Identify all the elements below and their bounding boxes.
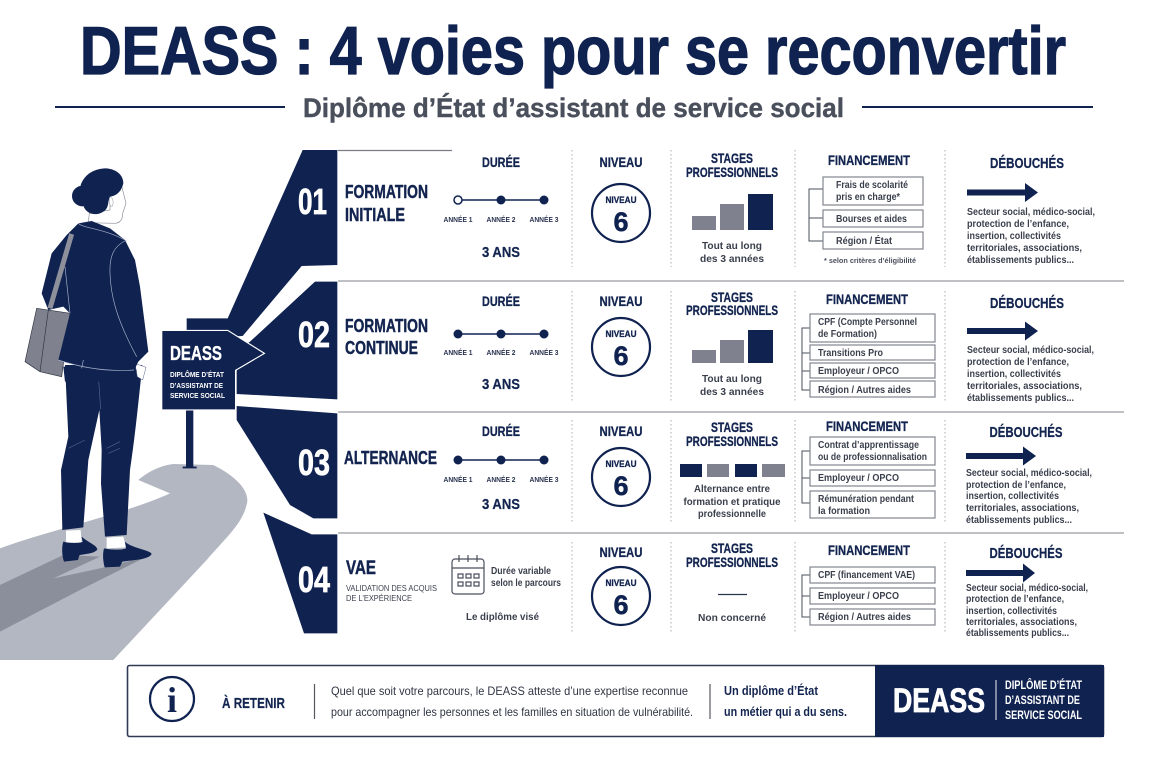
- row 03 funding: FINANCEMENT: [826, 419, 909, 434]
- row 03 careers: territoriales, associations,: [966, 503, 1079, 514]
- row 02 internships: PROFESSIONNELS: [686, 303, 778, 318]
- callout: à retenir: [128, 665, 1104, 737]
- row 02 careers: [967, 295, 1094, 404]
- row 03 careers: DÉBOUCHÉS: [990, 424, 1062, 441]
- row 04 name: DE L’EXPÉRIENCE: [346, 594, 412, 603]
- row 02 funding: Transitions Pro: [818, 348, 883, 359]
- row 03 level: [592, 424, 650, 506]
- route shape 04: [263, 513, 337, 633]
- row 01 level: NIVEAU: [600, 155, 642, 170]
- row 04 internships: Non concerné: [698, 612, 766, 624]
- route numbers: 02: [298, 314, 330, 355]
- callout heading: À RETENIR: [222, 695, 285, 712]
- row 04 name: [346, 558, 437, 603]
- row 04 careers: insertion, collectivités: [966, 606, 1057, 617]
- callout tagline: [724, 683, 847, 719]
- row 03 careers: insertion, collectivités: [966, 491, 1059, 502]
- row 02 duration: [444, 294, 559, 393]
- row 02 careers: insertion, collectivités: [967, 369, 1061, 380]
- row 04 careers: établissements publics...: [966, 628, 1069, 639]
- row 03 duration: DURÉE: [482, 424, 520, 439]
- woman: [25, 168, 152, 567]
- row 04 careers: protection de l’enfance,: [966, 594, 1064, 605]
- row 01 careers: protection de l’enfance,: [967, 219, 1069, 230]
- row 03 duration: ANNÉE 1: [444, 475, 473, 484]
- row 01 careers: territoriales, associations,: [967, 243, 1082, 254]
- row 02 careers: Secteur social, médico-social,: [967, 345, 1094, 356]
- row 03 funding: ou de professionnalisation: [818, 452, 927, 463]
- row 01 careers: [967, 155, 1095, 266]
- route numbers: 04: [298, 559, 330, 600]
- row 02 duration: DURÉE: [482, 294, 520, 309]
- row 01 duration: ANNÉE 3: [530, 215, 559, 224]
- row 01 duration: ANNÉE 2: [486, 215, 516, 224]
- sign board: [162, 331, 263, 409]
- row 02 funding: de Formation): [818, 329, 877, 340]
- row 02 funding: FINANCEMENT: [826, 292, 909, 307]
- route numbers: 01: [298, 181, 327, 222]
- row 01 funding: Bourses et aides: [836, 214, 907, 225]
- row 04 duration: Durée variable: [491, 566, 551, 577]
- row 02 duration: ANNÉE 1: [444, 348, 473, 357]
- row 01 funding: [809, 153, 923, 265]
- row 02 level: [592, 294, 650, 376]
- row 04 level: [592, 545, 650, 625]
- row 03 level: 6: [613, 471, 629, 501]
- row 03 duration: ANNÉE 2: [486, 475, 516, 484]
- row 03 careers: établissements publics...: [966, 515, 1072, 526]
- row 01 name: [345, 182, 428, 225]
- row 01 level: 6: [613, 207, 629, 237]
- row 01 internships: [686, 151, 778, 265]
- row 03 duration: ANNÉE 3: [530, 475, 559, 484]
- route numbers: [298, 181, 330, 600]
- path: [0, 464, 247, 660]
- route numbers: 03: [298, 442, 330, 483]
- row 02 internships: des 3 années: [700, 386, 764, 398]
- row 01 level: [592, 155, 650, 242]
- row 02 careers: DÉBOUCHÉS: [990, 295, 1064, 312]
- row 02 internships: [686, 290, 778, 398]
- route shape 01: [187, 150, 337, 337]
- route shape 03: [237, 406, 337, 518]
- row 01 careers: établissements publics...: [967, 255, 1074, 266]
- row 02 funding: Région / Autres aides: [818, 385, 911, 396]
- row 01: formation initiale: [345, 151, 1095, 266]
- row 04 level: 6: [613, 590, 629, 620]
- sign post: [183, 409, 197, 468]
- icon: information: i: [167, 680, 177, 720]
- row 03 funding: Rémunération pendant: [818, 494, 915, 505]
- sign text: DEASS: [170, 343, 222, 365]
- row 04 funding: CPF (financement VAE): [818, 570, 915, 581]
- row 02 duration: ANNÉE 2: [486, 348, 516, 357]
- row 03 funding: Employeur / OPCO: [818, 473, 899, 484]
- DEASS badge: [875, 665, 1104, 737]
- row 02 careers: territoriales, associations,: [967, 381, 1082, 392]
- row 01 name: INITIALE: [345, 205, 405, 225]
- row 04 careers: Secteur social, médico-social,: [966, 583, 1088, 594]
- row 04 internships: PROFESSIONNELS: [686, 555, 778, 570]
- callout body: pour accompagner les personnes et les familles en situation de vulnérabilité.: [331, 705, 693, 719]
- row 03 internships: formation et pratique: [684, 497, 781, 508]
- row 03 duration: [444, 424, 559, 513]
- row 01 level: NIVEAU: [606, 195, 637, 206]
- row 01 duration: ANNÉE 1: [444, 215, 473, 224]
- row 03 name: ALTERNANCE: [344, 448, 437, 468]
- row 03 careers: Secteur social, médico-social,: [966, 468, 1092, 479]
- row 01 duration: DURÉE: [482, 155, 520, 170]
- row 01 internships: STAGES: [711, 151, 753, 166]
- callout tagline: un métier qui a du sens.: [724, 705, 847, 719]
- row 02 careers: protection de l’enfance,: [967, 357, 1069, 368]
- row 01 name: FORMATION: [345, 182, 428, 202]
- row 02 name: FORMATION: [345, 316, 428, 336]
- sign text: DIPLÔME D’ÉTAT: [170, 370, 224, 379]
- row 01 duration: 3 ANS: [482, 244, 520, 261]
- row 02 level: NIVEAU: [606, 329, 637, 340]
- row 03 level: NIVEAU: [600, 424, 642, 439]
- row 04 duration: Le diplôme visé: [466, 611, 539, 623]
- row 04 careers: [966, 545, 1088, 639]
- row 03 internships: STAGES: [711, 420, 753, 435]
- row 03 duration: 3 ANS: [482, 496, 520, 513]
- row 03 internships: PROFESSIONNELS: [686, 434, 778, 449]
- row 01 funding: pris en charge*: [836, 192, 900, 203]
- row 02 level: NIVEAU: [600, 294, 642, 309]
- row 03 internships: Alternance entre: [694, 484, 770, 495]
- row 04 name: VALIDATION DES ACQUIS: [346, 584, 437, 593]
- row 04 internships: STAGES: [711, 541, 753, 556]
- icon: calendar: [452, 555, 484, 594]
- DEASS badge: DIPLÔME D’ÉTAT: [1005, 679, 1082, 692]
- row 04 duration: [466, 566, 561, 623]
- row 01 careers: DÉBOUCHÉS: [990, 155, 1064, 172]
- row 04 funding: [802, 543, 935, 625]
- row 02 internships: Tout au long: [702, 373, 762, 385]
- row 01 careers: Secteur social, médico-social,: [967, 207, 1095, 218]
- row 04 careers: DÉBOUCHÉS: [990, 545, 1062, 562]
- row 02 name: [345, 316, 428, 358]
- row 03 funding: Contrat d’apprentissage: [818, 440, 919, 451]
- row 01 funding: Région / État: [836, 234, 893, 247]
- sign text: SERVICE SOCIAL: [170, 391, 225, 400]
- row 01 duration: [444, 155, 559, 261]
- row 01 funding: * selon critères d’éligibilité: [824, 258, 916, 265]
- row 03 funding: [802, 419, 935, 518]
- sign text: D’ASSISTANT DE: [170, 381, 223, 390]
- route shape 02: [233, 282, 337, 399]
- subtitle: Diplôme d’État d’assistant de service social: [303, 92, 844, 123]
- row 02 duration: ANNÉE 3: [530, 348, 559, 357]
- row 04 duration: selon le parcours: [491, 578, 561, 589]
- row 03: alternance: [344, 419, 1092, 526]
- row dividers: [338, 150, 1124, 633]
- row 01 careers: insertion, collectivités: [967, 231, 1061, 242]
- row 02: formation continue: [345, 290, 1094, 404]
- row 01 internships: des 3 années: [700, 253, 764, 265]
- row 03 funding: la formation: [818, 506, 870, 517]
- row 02 internships: STAGES: [711, 290, 753, 305]
- row 04 funding: Employeur / OPCO: [818, 591, 899, 602]
- row 02 funding: CPF (Compte Personnel: [818, 317, 917, 328]
- callout body: [331, 684, 693, 719]
- illustration: woman on a path facing the sign: [0, 150, 337, 660]
- sign text: [170, 343, 225, 400]
- row 02 duration: 3 ANS: [482, 376, 520, 393]
- DEASS badge: SERVICE SOCIAL: [1005, 710, 1082, 722]
- row 03 internships: professionnelle: [698, 509, 766, 520]
- row 04 name: VAE: [346, 558, 376, 579]
- row 01 funding: Frais de scolarité: [836, 180, 908, 191]
- row 02 level: 6: [613, 341, 629, 371]
- DEASS badge: DEASS: [893, 682, 985, 720]
- callout tagline: Un diplôme d’État: [724, 683, 819, 698]
- callout body: Quel que soit votre parcours, le DEASS atteste d’une expertise reconnue: [331, 684, 688, 698]
- row 03 careers: [966, 424, 1092, 526]
- row 04 level: NIVEAU: [600, 545, 642, 560]
- row 02 funding: [802, 292, 935, 397]
- row 02 funding: Employeur / OPCO: [818, 366, 899, 377]
- row 04 careers: territoriales, associations,: [966, 617, 1077, 628]
- row 01 internships: Tout au long: [702, 240, 762, 252]
- row 02 careers: établissements publics...: [967, 393, 1074, 404]
- row 04 funding: FINANCEMENT: [828, 543, 911, 558]
- row 03 careers: protection de l’enfance,: [966, 480, 1066, 491]
- row 04 internships: [686, 541, 778, 624]
- row 01 funding: FINANCEMENT: [828, 153, 911, 168]
- row 04: VAE: [346, 541, 1088, 639]
- row 04 level: NIVEAU: [606, 578, 637, 589]
- icon: information: [150, 677, 194, 721]
- DEASS badge: D’ASSISTANT DE: [1005, 695, 1080, 707]
- row 01 internships: PROFESSIONNELS: [686, 165, 778, 180]
- row 03 internships: [680, 420, 785, 520]
- row 03 level: NIVEAU: [606, 459, 637, 470]
- row 04 funding: Région / Autres aides: [818, 612, 911, 623]
- row 02 name: CONTINUE: [345, 338, 418, 358]
